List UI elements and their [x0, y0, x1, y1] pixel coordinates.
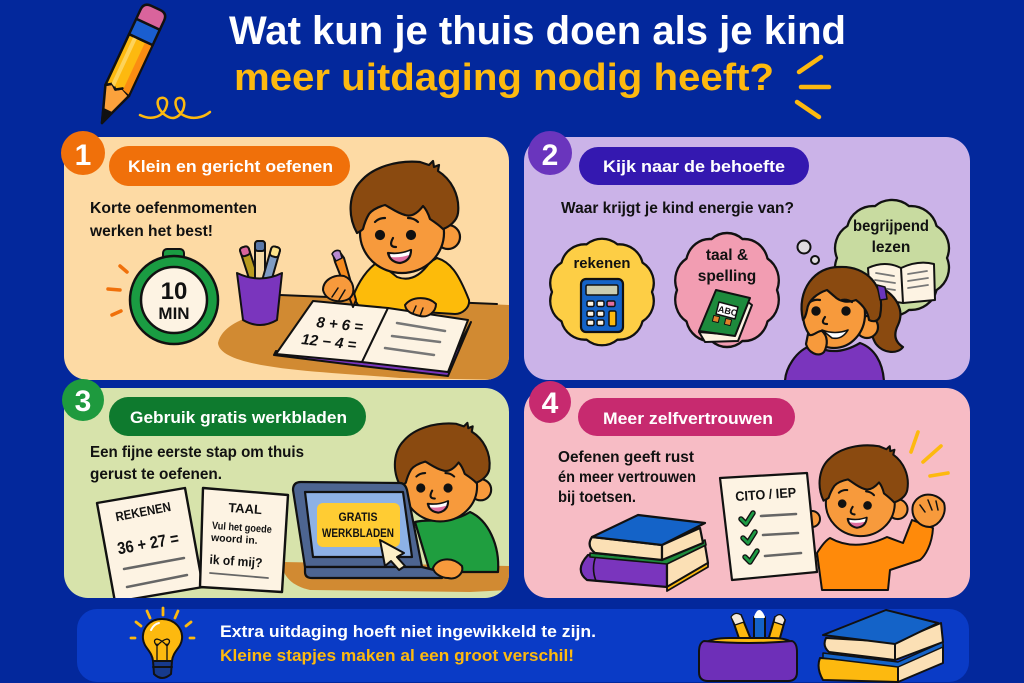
banner text: Extra uitdaging hoeft niet ingewikkeld te zijn.	[220, 623, 596, 641]
worksheet: taal: woord in.	[210, 532, 258, 547]
question text: Waar krijgt je kind energie van?	[561, 200, 794, 217]
icon: stacked books	[581, 515, 708, 591]
body text 4: én meer vertrouwen	[558, 469, 696, 486]
worksheet: rekenen	[97, 488, 203, 602]
title	[229, 9, 846, 99]
shirt	[353, 258, 469, 314]
thought bubbles	[798, 240, 819, 264]
number badge 4: 4	[542, 387, 559, 420]
body text 1: werken het best!	[89, 223, 213, 240]
number badge 1: 1	[75, 139, 91, 172]
cloud: rekenen	[550, 239, 654, 345]
checklist paper: CITO / IEP	[735, 485, 797, 504]
child with notebook	[274, 161, 471, 376]
body text 4	[558, 449, 696, 506]
title: meer uitdaging nodig heeft?	[234, 57, 774, 99]
desk	[218, 295, 510, 380]
icon: pencil	[90, 2, 167, 128]
panel 4: Meer zelfvertrouwen	[524, 381, 970, 598]
head	[351, 161, 460, 273]
heading pill 1: Klein en gericht oefenen	[128, 157, 333, 176]
worksheet: taal: ik of mij?	[209, 552, 263, 570]
banner text	[220, 623, 596, 665]
child thinking	[785, 267, 903, 382]
cloud: taal en spelling: spelling	[698, 268, 756, 285]
body text 3	[90, 444, 304, 483]
desk 3	[282, 562, 509, 592]
icon: ABC book: ABC	[717, 304, 739, 318]
number badge 2: 2	[542, 139, 558, 172]
body text 1	[89, 200, 257, 240]
worksheet: taal: TAAL	[228, 500, 263, 517]
laptop	[293, 482, 442, 578]
number badge 3: 3	[75, 385, 91, 418]
number badge 2	[528, 131, 572, 175]
icon: books	[819, 610, 943, 682]
heading pill 4	[578, 398, 795, 436]
icon: pencil cup	[237, 241, 282, 325]
heading pill 3: Gebruik gratis werkbladen	[130, 408, 347, 427]
bottom banner	[77, 608, 969, 682]
heading pill 4: Meer zelfvertrouwen	[603, 409, 773, 428]
icon: squiggle	[140, 98, 210, 118]
cloud: rekenen: rekenen	[574, 255, 630, 272]
body text 4: Oefenen geeft rust	[558, 449, 694, 466]
cloud: taal en spelling: taal &	[706, 247, 748, 264]
icon: cursor	[380, 540, 405, 570]
panel 2: Kijk naar de behoefte	[524, 131, 970, 382]
hand	[433, 559, 462, 578]
worksheet: rekenen: REKENEN	[114, 499, 172, 524]
icon: title sparks	[797, 57, 829, 117]
body	[817, 520, 933, 590]
checklist paper	[720, 473, 817, 580]
icon: timer 10 min: MIN	[158, 304, 190, 323]
icon: timer 10 min: 10	[161, 278, 187, 305]
title: Wat kun je thuis doen als je kind	[229, 9, 846, 53]
head	[816, 441, 912, 539]
hand holding paper	[804, 511, 820, 527]
panel 3: Gebruik gratis werkbladen	[62, 379, 509, 602]
child with notebook: 12 − 4 =	[301, 331, 357, 354]
cloud: taal en spelling	[675, 233, 779, 347]
cloud: begrijpend lezen	[835, 200, 949, 316]
hand and pencil	[333, 251, 356, 307]
icon: yellow sparks	[911, 432, 948, 476]
heading pill 2: Kijk naar de behoefte	[603, 157, 785, 176]
icon: timer 10 min	[108, 249, 218, 344]
icon: light bulb	[131, 608, 194, 678]
button on screen: GRATIS	[338, 512, 378, 524]
heading pill 3	[109, 397, 366, 436]
fist	[912, 495, 945, 527]
button on screen	[317, 503, 400, 547]
cloud: begrijpend lezen: lezen	[872, 239, 910, 256]
cloud: begrijpend lezen: begrijpend	[853, 218, 929, 235]
number badge 1	[61, 131, 105, 175]
child with checklist	[720, 441, 945, 590]
heading pill 2	[579, 147, 809, 185]
worksheet: rekenen: 36 + 27 =	[116, 529, 180, 558]
child with laptop	[293, 423, 498, 578]
body text 1: Korte oefenmomenten	[90, 200, 257, 217]
icon: pencil case	[699, 611, 797, 681]
body text 3: gerust te oefenen.	[90, 466, 222, 483]
head	[395, 423, 491, 521]
icon: open book	[868, 263, 935, 303]
body text 3: Een fijne eerste stap om thuis	[90, 444, 304, 461]
panel 1: Klein en gericht oefenen	[61, 131, 510, 380]
button on screen: WERKBLADEN	[322, 528, 394, 540]
worksheet: taal: Vul het goede	[211, 520, 272, 536]
banner text: Kleine stapjes maken al een groot verschil!	[220, 647, 574, 665]
number badge 4	[529, 381, 571, 423]
worksheet: taal	[200, 488, 288, 592]
body	[415, 512, 498, 572]
heading pill 1	[109, 146, 350, 186]
number badge 3	[62, 379, 104, 421]
body text 4: bij toetsen.	[558, 489, 636, 506]
notebook	[274, 301, 471, 376]
child with notebook: 8 + 6 =	[316, 314, 364, 336]
icon: calculator	[581, 279, 623, 332]
